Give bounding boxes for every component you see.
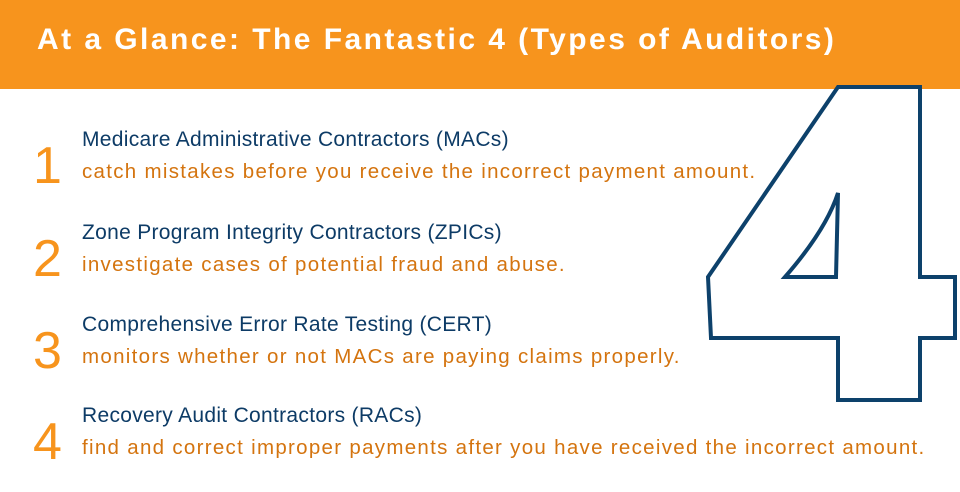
item 4 (33, 404, 926, 471)
item 1: 1 (33, 137, 62, 195)
item 3: monitors whether or not MACs are paying claims properly. (82, 345, 681, 368)
header banner (0, 0, 960, 89)
item 2: investigate cases of potential fraud and abuse. (82, 253, 566, 276)
item 4: Recovery Audit Contractors (RACs) (82, 404, 422, 427)
item 1: Medicare Administrative Contractors (MACs) (82, 128, 509, 151)
title: At a Glance: The Fantastic 4 (Types of Auditors) (37, 23, 836, 56)
item 2 (33, 221, 566, 288)
item 4: 4 (33, 413, 62, 471)
item 2: 2 (33, 230, 62, 288)
item 3 (33, 313, 681, 380)
item 1: catch mistakes before you receive the incorrect payment amount. (82, 160, 756, 183)
item 3: Comprehensive Error Rate Testing (CERT) (82, 313, 492, 336)
item 2: Zone Program Integrity Contractors (ZPICs) (82, 221, 502, 244)
item 4: find and correct improper payments after you have received the incorrect amount. (82, 436, 926, 459)
item 3: 3 (33, 322, 62, 380)
item 1 (33, 128, 756, 195)
